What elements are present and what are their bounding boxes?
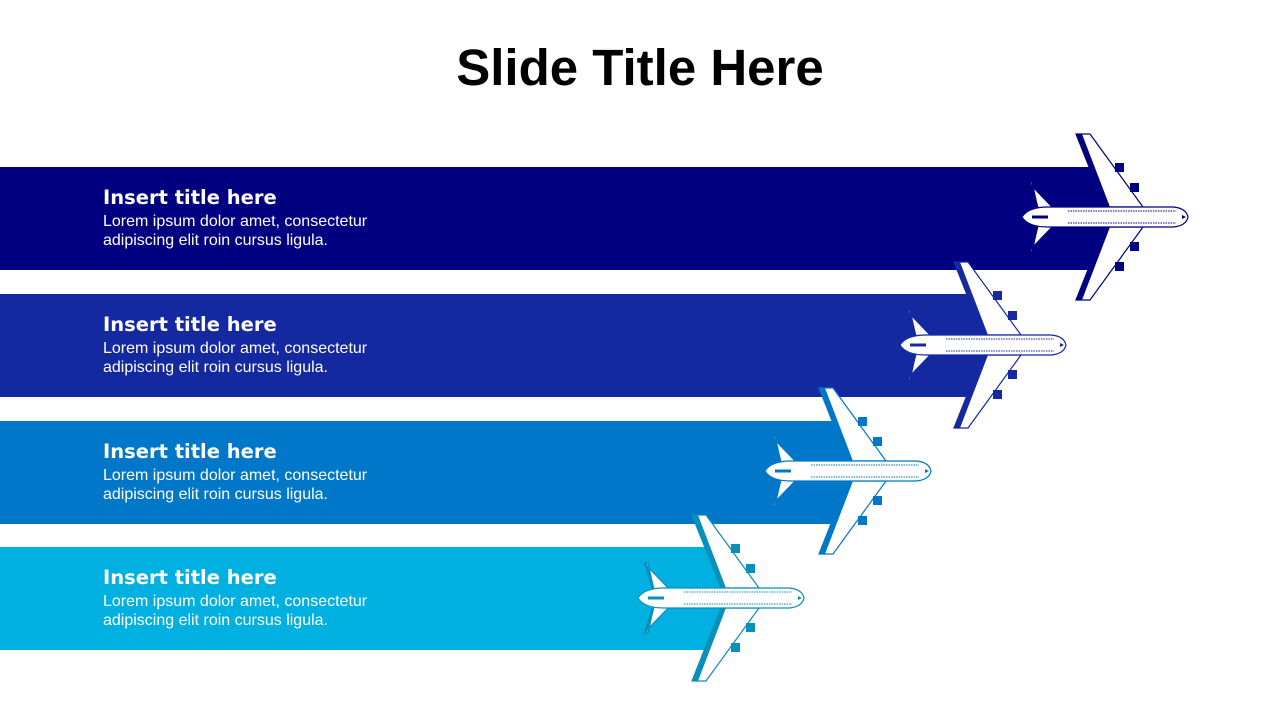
panel: item 3 [0, 421, 849, 524]
panel: item 3: adipiscing elit roin cursus ligula. [103, 486, 328, 503]
panel: item 4: adipiscing elit roin cursus ligula. [103, 612, 328, 629]
panel: item 2: Insert title here [103, 313, 277, 336]
panel: item 1: Insert title here [103, 186, 277, 209]
panel: item 4 [0, 547, 722, 650]
title: Slide Title Here [456, 39, 824, 96]
icon: airplane 1 [1022, 134, 1188, 300]
panel: item 1: adipiscing elit roin cursus ligula. [103, 232, 328, 249]
panel: item 1 [0, 167, 1106, 270]
panel: item 2: Lorem ipsum dolor amet, consectetur [103, 340, 367, 357]
panel: item 4: Lorem ipsum dolor amet, consectetur [103, 593, 367, 610]
panel: item 2 [0, 294, 984, 397]
panel: item 2: adipiscing elit roin cursus ligula. [103, 359, 328, 376]
icon: airplane 2 [900, 262, 1066, 428]
panel: item 3: Insert title here [103, 440, 277, 463]
panel: item 1: Lorem ipsum dolor amet, consectetur [103, 213, 367, 230]
icon: airplane 3 [765, 388, 931, 554]
panel: item 4: Insert title here [103, 566, 277, 589]
icon: airplane 4 [638, 515, 804, 681]
panel: item 3: Lorem ipsum dolor amet, consectetur [103, 467, 367, 484]
